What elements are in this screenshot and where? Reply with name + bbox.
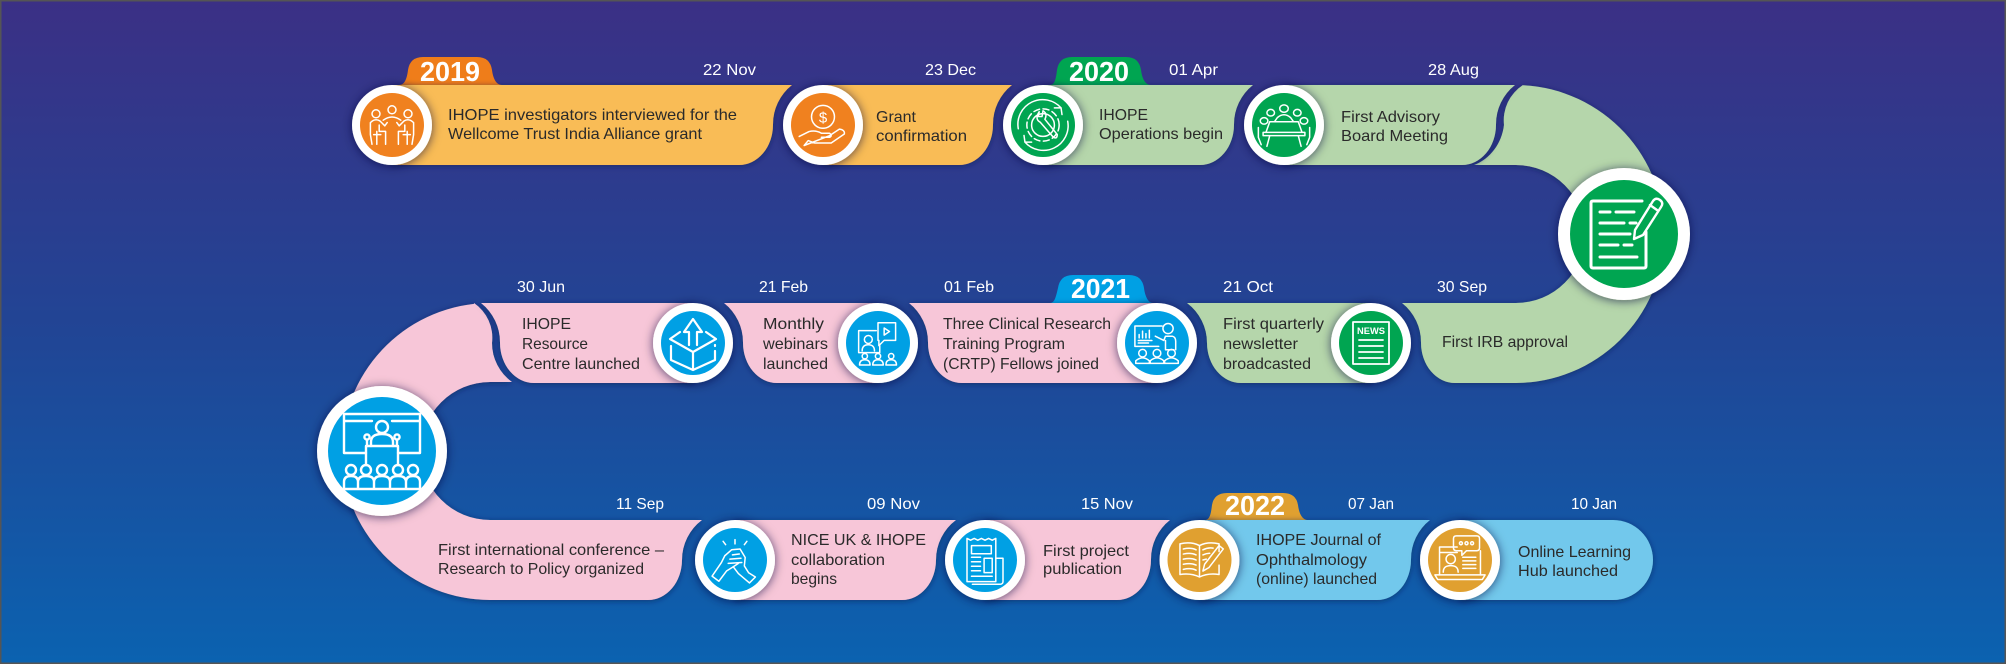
segment: 01 Apr operations begin — [1003, 56, 1253, 165]
band: light blue — [1200, 520, 1430, 600]
icon: journal publication — [945, 520, 1025, 600]
date: 09 Nov: 09 Nov — [867, 496, 920, 513]
band: pink — [735, 520, 956, 600]
date: 23 Dec: 23 Dec — [925, 62, 976, 79]
date: 01 Feb: 01 Feb — [944, 279, 994, 296]
text: journal of ophthalmology: Ophthalmology — [1256, 552, 1367, 569]
segment: 30 Jun resource centre — [481, 279, 733, 383]
text: journal of ophthalmology: (online) launched — [1256, 571, 1377, 588]
band: light blue rounded end — [1460, 520, 1653, 600]
text: online learning hub: Hub launched — [1518, 563, 1618, 580]
text: NICE UK collaboration: collaboration — [791, 552, 885, 569]
icon: laptop with chat bubble — [1420, 520, 1500, 600]
band: green — [1284, 85, 1515, 165]
year tab: 2021: 2021 — [1071, 273, 1130, 304]
icon: newspaper — [1331, 303, 1411, 383]
icon: trainer at board — [1117, 303, 1197, 383]
year tab: 2021 — [1050, 273, 1153, 304]
year tab: 2019: 2019 — [420, 56, 480, 87]
text: First international conference: First international conference – — [438, 542, 664, 559]
segment: 28 Aug advisory board — [1244, 62, 1515, 165]
text: NICE UK collaboration: begins — [791, 571, 837, 588]
date: 11 Sep: 11 Sep — [616, 496, 664, 513]
text: first project publication: publication — [1043, 561, 1122, 578]
text: advisory board meeting — [1341, 109, 1448, 145]
segment: 21 Oct newsletter — [1187, 279, 1411, 383]
text: monthly webinars: launched — [763, 356, 828, 373]
text: training program fellows: Training Program — [943, 336, 1065, 353]
text: monthly webinars: Monthly — [763, 316, 824, 333]
text: journal of ophthalmology — [1256, 532, 1382, 588]
date: 30 Jun: 30 Jun — [517, 279, 565, 296]
text: monthly webinars: webinars — [762, 336, 828, 353]
segment: 15 Nov first publication — [945, 496, 1170, 600]
segment: 01 Feb CRTP fellows — [909, 273, 1197, 383]
text: monthly webinars — [762, 316, 828, 373]
band: pink — [481, 303, 693, 383]
text: First IRB approval: First IRB approval — [1442, 334, 1568, 351]
text: resource centre — [522, 316, 640, 373]
text: journal of ophthalmology: IHOPE Journal of — [1256, 532, 1382, 549]
text: quarterly newsletter: newsletter — [1223, 336, 1299, 353]
text: investigators interviewed: Wellcome Trust India Alliance grant — [448, 126, 703, 143]
icon: gear and wrench — [1003, 85, 1083, 165]
segment: 21 Feb monthly webinars — [724, 279, 918, 383]
text: first project publication: First project — [1043, 543, 1130, 560]
text: operations begin: Operations begin — [1099, 126, 1223, 143]
icon: hand holding coin — [783, 85, 863, 165]
text: online learning hub: Online Learning — [1518, 544, 1631, 561]
text: resource centre: IHOPE — [522, 316, 571, 333]
text: NICE UK collaboration — [791, 532, 926, 588]
date: 30 Sep: 30 Sep — [1437, 279, 1487, 296]
icon: open book and pencil — [1160, 520, 1240, 600]
date: 28 Aug: 28 Aug — [1428, 62, 1479, 79]
band: pink — [724, 303, 878, 383]
icon: conference speaker and audience, large milestone — [317, 386, 447, 516]
segment: 22 Nov 2019 interview — [352, 56, 792, 165]
icon: open box with arrow — [653, 303, 733, 383]
icon: people meeting — [352, 85, 432, 165]
text: quarterly newsletter: First quarterly — [1223, 316, 1324, 333]
text: operations begin: IHOPE — [1099, 107, 1148, 124]
text: NICE UK collaboration: NICE UK & IHOPE — [791, 532, 926, 549]
segment: 07 Jan journal launched — [1160, 490, 1430, 600]
date: 22 Nov: 22 Nov — [703, 62, 756, 79]
band: pink U-turn with first international conference — [342, 303, 702, 600]
year tab: 2020: 2020 — [1069, 56, 1129, 87]
date: 21 Oct: 21 Oct — [1223, 279, 1274, 296]
icon: boardroom table — [1244, 85, 1324, 165]
year tab: 2022 — [1205, 490, 1308, 521]
text: First international conference — [438, 542, 664, 578]
icon: clasped hands — [695, 520, 775, 600]
text: First international conference: Research to Policy organized — [438, 561, 644, 578]
band: green — [1187, 303, 1371, 383]
text: grant confirmation — [876, 109, 967, 145]
text: training program fellows — [943, 316, 1111, 373]
text: advisory board meeting: Board Meeting — [1341, 128, 1448, 145]
band: yellow — [823, 85, 1012, 165]
date: 15 Nov: 15 Nov — [1081, 496, 1133, 513]
text: training program fellows: (CRTP) Fellows joined — [943, 356, 1099, 373]
text: grant confirmation: Grant — [876, 109, 917, 126]
year tab: 2020 — [1050, 56, 1151, 87]
text: training program fellows: Three Clinical Research — [943, 316, 1111, 333]
band: green U-turn with First IRB approval — [1402, 85, 1664, 383]
text: operations begin — [1099, 107, 1223, 143]
text: resource centre: Resource — [522, 336, 588, 353]
text: investigators interviewed: IHOPE investigators interviewed for the — [448, 107, 737, 124]
segment: 09 Nov NICE UK collaboration — [695, 496, 956, 600]
date: 01 Apr: 01 Apr — [1169, 62, 1219, 79]
text: resource centre: Centre launched — [522, 356, 640, 373]
icon: hand holding coin: $ — [819, 110, 828, 126]
icon: document with pen, large milestone — [1558, 168, 1690, 300]
icon: webinar screen — [838, 303, 918, 383]
year tab: 2022: 2022 — [1225, 490, 1285, 521]
band: green — [1043, 85, 1253, 165]
text: online learning hub — [1518, 544, 1631, 580]
segment: 10 Jan online learning hub — [1420, 496, 1653, 600]
text: quarterly newsletter: broadcasted — [1223, 356, 1311, 373]
year tab: 2019 — [399, 56, 502, 87]
date: 10 Jan: 10 Jan — [1571, 496, 1617, 513]
text: quarterly newsletter — [1223, 316, 1324, 373]
text: first project publication — [1043, 543, 1130, 578]
band: yellow — [392, 85, 792, 165]
band: pink — [985, 520, 1170, 600]
band: pink — [909, 303, 1157, 383]
text: grant confirmation: confirmation — [876, 128, 967, 145]
date: 07 Jan: 07 Jan — [1348, 496, 1394, 513]
text: investigators interviewed — [448, 107, 737, 143]
text: advisory board meeting: First Advisory — [1341, 109, 1440, 126]
icon: newspaper: NEWS — [1357, 326, 1385, 337]
segment: 23 Dec grant confirmation — [783, 62, 1012, 165]
date: 21 Feb: 21 Feb — [759, 279, 808, 296]
